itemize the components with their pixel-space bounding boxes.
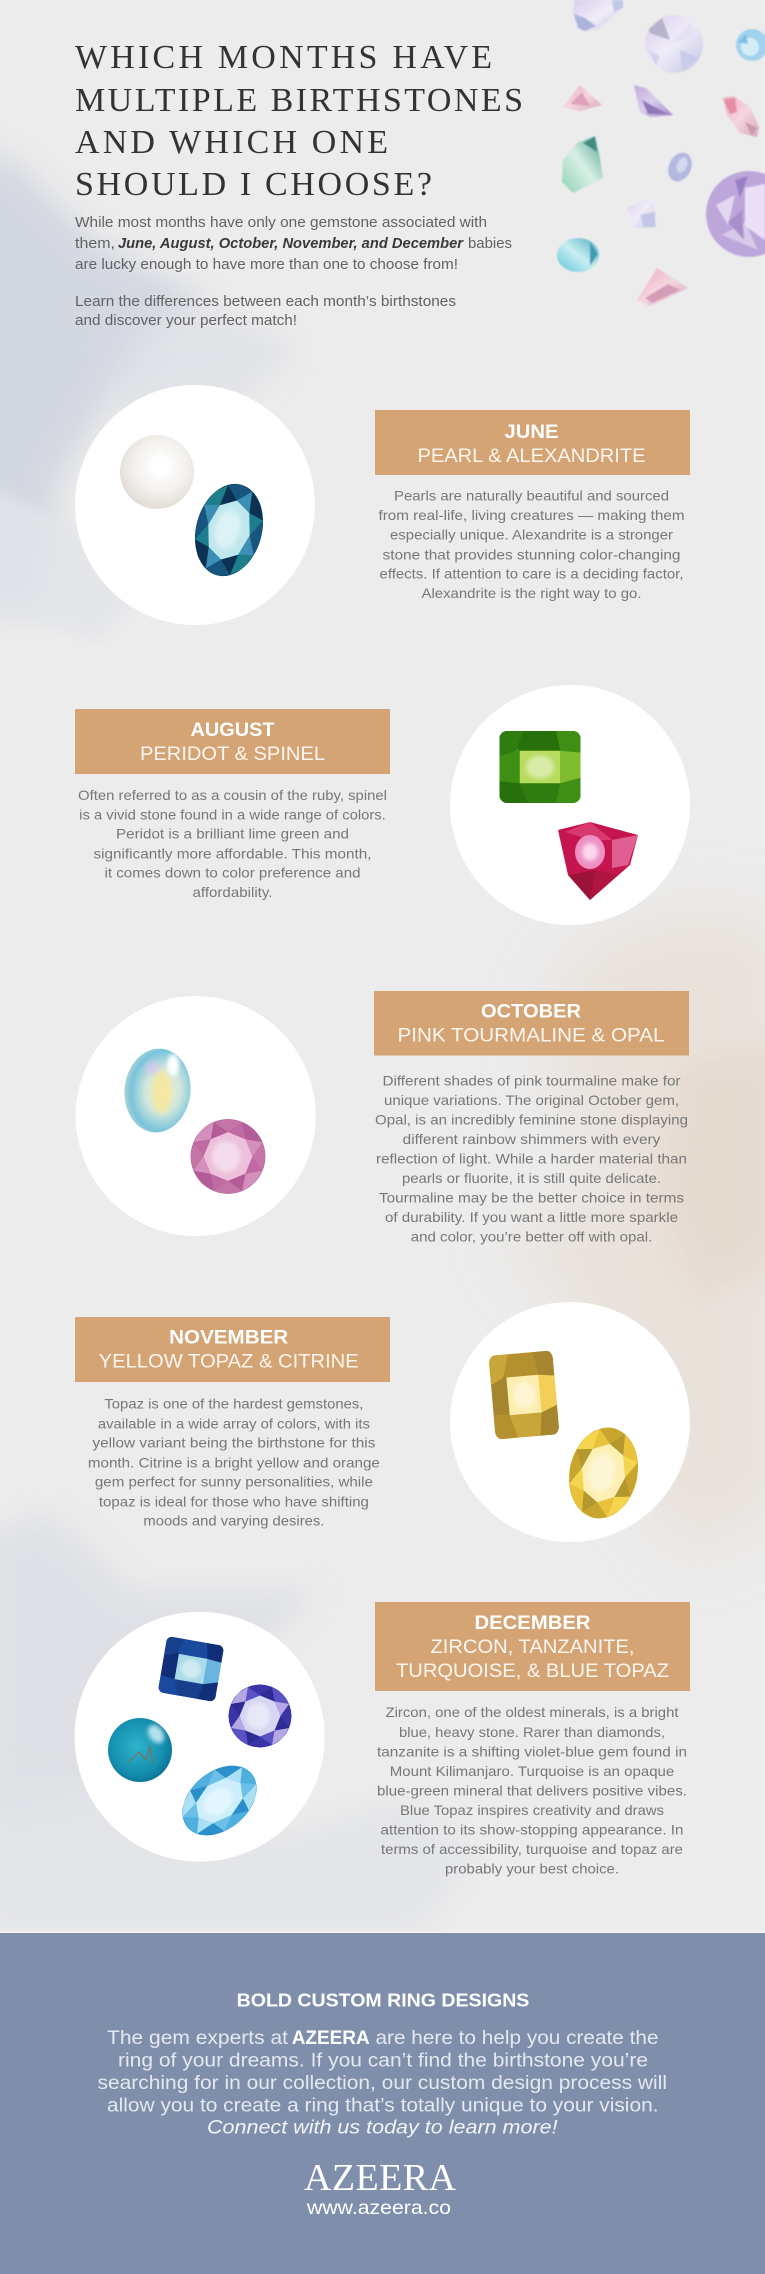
icon: yellow topaz	[488, 1350, 560, 1440]
body text: unique variations. The original October gem,	[384, 1092, 679, 1108]
body text: tanzanite is a shifting violet-blue gem found in	[377, 1744, 687, 1760]
body text: Blue Topaz inspires creativity and draws	[400, 1802, 664, 1818]
background wash: upper blue-grey	[0, 140, 300, 640]
icon: alexandrite	[185, 476, 273, 584]
body text: Pearls are naturally beautiful and sourced	[394, 488, 669, 504]
body text: Different shades of pink tourmaline make for	[382, 1072, 681, 1088]
body text	[377, 1704, 687, 1877]
icon: pink tourmaline	[190, 1119, 266, 1194]
body text: Mount Kilimanjaro. Turquoise is an opaque	[390, 1763, 674, 1779]
footer text: Connect with us today to learn more!	[207, 2117, 558, 2139]
banner	[75, 1317, 390, 1382]
body text: stone that provides stunning color-changing	[382, 546, 680, 562]
icon: zircon	[158, 1636, 224, 1702]
gem: pale diamond	[627, 197, 656, 228]
body text	[78, 787, 387, 900]
gem: large pale round	[645, 15, 703, 73]
body text: and color, you’re better off with opal.	[411, 1228, 652, 1244]
banner text: PEARL & ALEXANDRITE	[418, 445, 646, 467]
title	[75, 39, 523, 203]
body text: Zircon, one of the oldest minerals, is a bright	[386, 1704, 679, 1720]
title: SHOULD I CHOOSE?	[75, 166, 432, 203]
footer text: are here to help you create the	[376, 2027, 658, 2049]
body text: attention to its show-stopping appearance. In	[380, 1822, 684, 1838]
panel: October	[76, 991, 689, 1244]
body text	[88, 1396, 380, 1529]
gem: big lilac round	[706, 171, 765, 257]
banner text: YELLOW TOPAZ & CITRINE	[99, 1351, 359, 1373]
gem: purple cone	[634, 85, 673, 117]
body text: blue-green mineral that delivers positive vibes.	[377, 1783, 687, 1799]
panel: August	[75, 685, 690, 925]
gem: pink cone	[563, 85, 602, 111]
footer text: AZEERA	[292, 2027, 370, 2049]
banner text: PINK TOURMALINE & OPAL	[398, 1025, 665, 1047]
circle	[75, 385, 315, 625]
banner text: DECEMBER	[474, 1612, 590, 1634]
panel: November	[75, 1302, 690, 1542]
icon: turquoise	[108, 1718, 172, 1782]
body text: topaz is ideal for those who have shifting	[99, 1493, 369, 1509]
banner text	[396, 1612, 669, 1682]
body text: Opal, is an incredibly feminine stone displaying	[375, 1111, 688, 1127]
gem: pink oval	[723, 96, 759, 137]
body text: significantly more affordable. This month,	[94, 845, 372, 861]
gem: pink triangle	[637, 268, 688, 306]
icon: tanzanite	[228, 1684, 292, 1748]
gem: small periwinkle oval	[664, 149, 696, 185]
panel: footer	[0, 1933, 765, 2274]
website: www.azeera.co	[306, 2197, 451, 2219]
banner text: AUGUST	[190, 719, 275, 741]
intro text: are lucky enough to have more than one to choose from!	[75, 257, 458, 273]
footer heading: BOLD CUSTOM RING DESIGNS	[237, 1991, 529, 2011]
footer text: ring of your dreams. If you can’t find the birthstone you’re	[118, 2049, 648, 2071]
circle	[450, 685, 690, 925]
gem: aqua round	[557, 238, 599, 272]
gem: pale blue pear	[573, 0, 623, 32]
banner	[375, 1602, 690, 1691]
title: AND WHICH ONE	[75, 124, 388, 161]
body text: Alexandrite is the right way to go.	[422, 585, 642, 601]
body text: moods and varying desires.	[143, 1513, 324, 1529]
banner	[75, 709, 390, 774]
body text: it comes down to color preference and	[104, 865, 360, 881]
intro text	[75, 215, 512, 329]
panel: June	[75, 385, 690, 625]
intro text: While most months have only one gemstone associated with	[75, 215, 487, 231]
banner text: JUNE	[504, 421, 558, 443]
body text: effects. If attention to care is a deciding factor,	[380, 566, 684, 582]
icon: peridot	[500, 731, 580, 803]
banner text	[418, 421, 646, 467]
title: WHICH MONTHS HAVE	[75, 39, 492, 76]
circle	[450, 1302, 690, 1542]
banner text	[99, 1327, 359, 1373]
intro text: them,	[75, 236, 115, 252]
body text: of durability. If you want a little more sparkle	[385, 1209, 678, 1225]
body text: reflection of light. While a harder material than	[376, 1150, 687, 1166]
banner	[375, 410, 690, 475]
body text: Topaz is one of the hardest gemstones,	[104, 1396, 363, 1412]
banner text: NOVEMBER	[169, 1327, 288, 1349]
body text: is a vivid stone found in a wide range of colors.	[79, 806, 386, 822]
intro text: June, August, October, November, and December	[118, 236, 464, 252]
gem: small blue round	[736, 29, 765, 61]
icon: citrine	[561, 1421, 646, 1525]
background wash: lower blue-grey	[0, 1512, 480, 1932]
body text: blue, heavy stone. Rarer than diamonds,	[399, 1724, 665, 1740]
icon: pearl	[120, 435, 194, 509]
title: MULTIPLE BIRTHSTONES	[75, 82, 523, 119]
logo: AZEERA	[304, 2157, 457, 2199]
banner text: PERIDOT & SPINEL	[140, 743, 325, 765]
intro text: Learn the differences between each month’s birthstones	[75, 294, 456, 310]
icon: spinel	[558, 822, 638, 900]
body text: Tourmaline may be the better choice in terms	[379, 1189, 684, 1205]
body text	[378, 488, 684, 601]
icon: opal	[120, 1045, 195, 1136]
body text	[375, 1072, 688, 1244]
banner text	[140, 719, 325, 765]
gem: green stone	[562, 136, 603, 193]
scattered gems, top right	[557, 0, 765, 306]
footer text	[98, 2027, 667, 2139]
body text: Often referred to as a cousin of the ruby, spinel	[78, 787, 387, 803]
intro text: and discover your perfect match!	[75, 313, 297, 329]
body text: month. Citrine is a bright yellow and orange	[88, 1454, 380, 1470]
body text: especially unique. Alexandrite is a stronger	[390, 527, 673, 543]
body text: yellow variant being the birthstone for this	[92, 1435, 375, 1451]
banner text: TURQUOISE, & BLUE TOPAZ	[396, 1660, 669, 1682]
body text: affordability.	[192, 884, 272, 900]
body text: probably your best choice.	[445, 1861, 619, 1877]
intro text: babies	[468, 236, 512, 252]
panel: December	[75, 1602, 690, 1877]
circle	[75, 1612, 325, 1862]
circle	[76, 996, 316, 1236]
footer text: allow you to create a ring that’s totally unique to your vision.	[107, 2094, 658, 2116]
body text: pearls or fluorite, it is still quite delicate.	[402, 1170, 661, 1186]
banner	[374, 991, 689, 1056]
footer text: The gem experts at	[107, 2027, 289, 2049]
body text: gem perfect for sunny personalities, while	[95, 1474, 373, 1490]
body text: terms of accessibility, turquoise and topaz are	[381, 1841, 683, 1857]
icon: blue topaz	[169, 1751, 270, 1850]
body text: available in a wide array of colors, with its	[98, 1415, 370, 1431]
background wash: peach	[500, 905, 765, 1560]
footer text: searching for in our collection, our custom design process will	[98, 2072, 667, 2094]
body text: Peridot is a brilliant lime green and	[116, 826, 349, 842]
banner text: ZIRCON, TANZANITE,	[430, 1636, 634, 1658]
body text: different rainbow shimmers with every	[403, 1131, 660, 1147]
banner text	[398, 1001, 665, 1047]
banner text: OCTOBER	[481, 1001, 581, 1023]
body text: from real-life, living creatures — making them	[378, 507, 684, 523]
